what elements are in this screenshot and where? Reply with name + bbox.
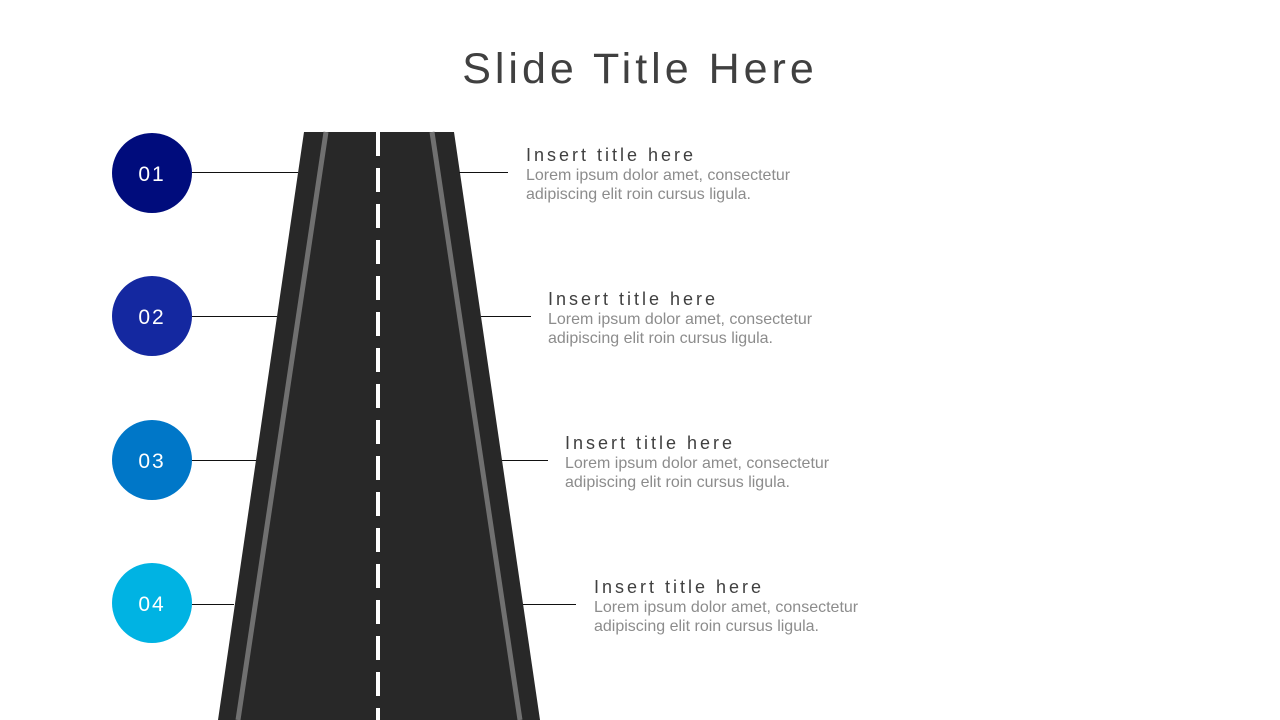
circle 04: 04	[138, 593, 166, 616]
text 4: Insert title here	[594, 577, 764, 597]
road	[218, 132, 540, 720]
text 1: adipiscing elit roin cursus ligula.	[526, 186, 751, 203]
text 3	[565, 433, 829, 491]
text 1: Insert title here	[526, 145, 696, 165]
circle 03	[112, 420, 192, 500]
text 4	[594, 577, 858, 635]
text 4: Lorem ipsum dolor amet, consectetur	[594, 599, 858, 616]
text 2	[548, 289, 812, 347]
text 4: adipiscing elit roin cursus ligula.	[594, 618, 819, 635]
circle 02	[112, 276, 192, 356]
connector lines	[192, 172, 576, 604]
text 1	[526, 145, 790, 203]
text 2: adipiscing elit roin cursus ligula.	[548, 330, 773, 347]
text 3: Insert title here	[565, 433, 735, 453]
title: Slide Title Here	[462, 45, 818, 93]
text 1: Lorem ipsum dolor amet, consectetur	[526, 167, 790, 184]
text 2: Insert title here	[548, 289, 718, 309]
text 2: Lorem ipsum dolor amet, consectetur	[548, 311, 812, 328]
text 3: adipiscing elit roin cursus ligula.	[565, 474, 790, 491]
circle 01	[112, 133, 192, 213]
circle 03: 03	[138, 450, 166, 473]
circle 01: 01	[138, 163, 166, 186]
circle 04	[112, 563, 192, 643]
circle 02: 02	[138, 306, 166, 329]
text 3: Lorem ipsum dolor amet, consectetur	[565, 455, 829, 472]
